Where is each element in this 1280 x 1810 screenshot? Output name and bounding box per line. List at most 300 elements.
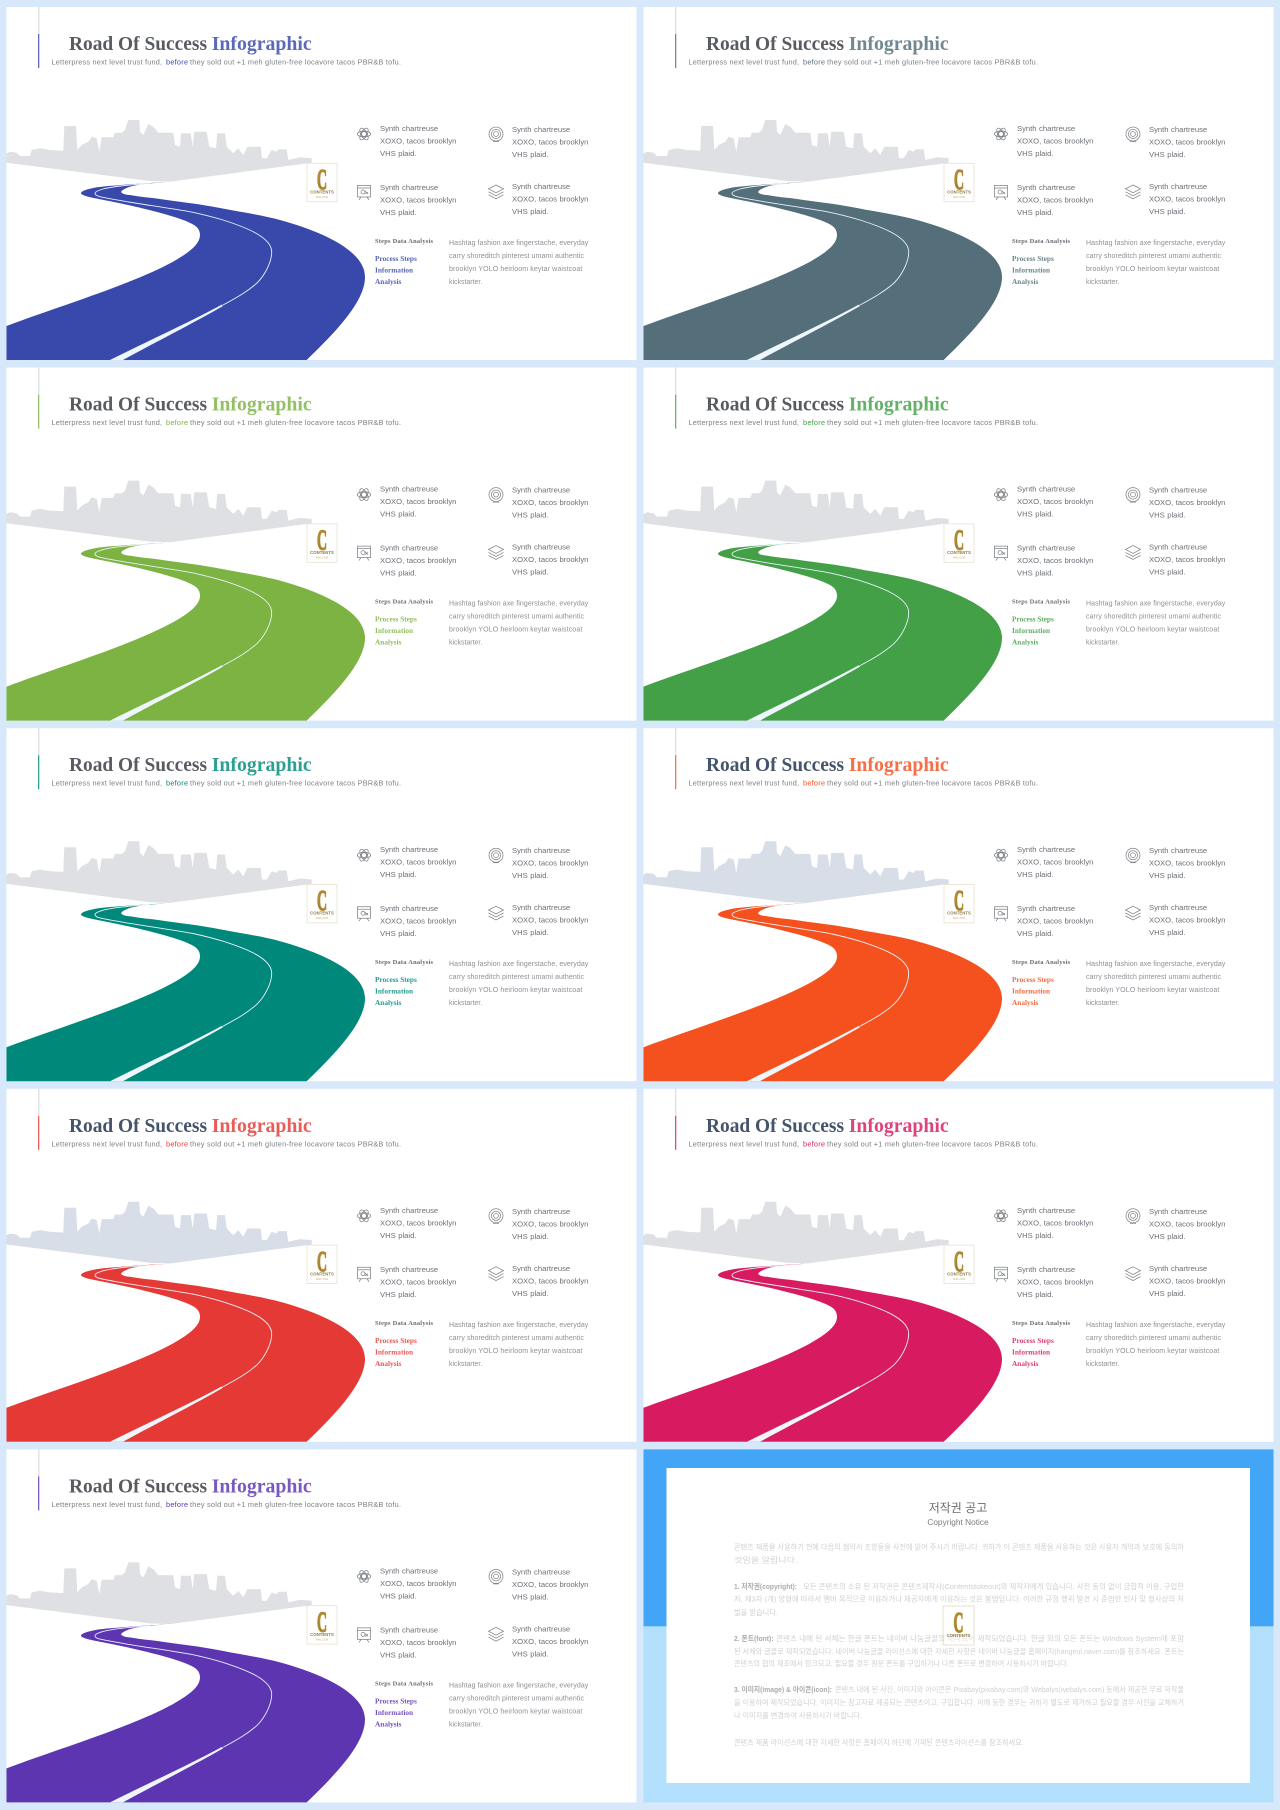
steps list: Information (375, 266, 413, 274)
icon: layers (1126, 546, 1140, 559)
notice section 1 (734, 1581, 1184, 1617)
feature text 2: XOXO, tacos brooklyn (512, 1580, 588, 1589)
icon: presentation (357, 546, 371, 561)
icon: layers (488, 546, 504, 559)
panel: light green slide (6, 368, 636, 721)
notice section 2: 2. 폰트(font): (734, 1634, 774, 1643)
feature text 3 (1017, 904, 1093, 938)
title: Road Of Success (69, 1475, 207, 1497)
icon: layers (488, 906, 504, 920)
feature text 3: Synth chartreuse (380, 904, 438, 913)
logo: C (317, 1246, 327, 1278)
title (706, 1115, 949, 1137)
steps list: Analysis (375, 1359, 402, 1368)
feature text 2: VHS plaid. (512, 150, 548, 159)
feature text 4: VHS plaid. (512, 207, 548, 216)
feature text 4 (512, 1624, 588, 1658)
steps list (375, 1320, 434, 1368)
subtitle: Letterpress next level trust fund, (52, 418, 162, 427)
notice logo: CONTENTS (947, 1633, 970, 1638)
steps list (1012, 1320, 1070, 1368)
feature text 4: XOXO, tacos brooklyn (512, 555, 588, 564)
steps list: Process Steps (375, 1336, 417, 1345)
title: Infographic (849, 33, 949, 55)
title: Infographic (849, 1115, 949, 1137)
road (6, 903, 365, 1081)
notice section 3: 3. 이미지(image) & 아이콘(icon): (734, 1684, 832, 1694)
feature text 1: Synth chartreuse (1017, 485, 1075, 494)
feature text 4: XOXO, tacos brooklyn (512, 916, 588, 925)
panel: red slide (6, 1089, 636, 1442)
subtitle: Letterpress next level trust fund, (52, 779, 162, 788)
title: Road Of Success (706, 754, 844, 776)
logo: CONTENTS (310, 550, 334, 555)
feature text 3: VHS plaid. (380, 929, 416, 938)
icon: layers (1126, 185, 1140, 199)
paragraph: carry shoreditch pinterest umami authentic (1086, 974, 1222, 981)
steps list: Steps Data Analysis (1012, 238, 1070, 245)
subtitle: they sold out +1 meh gluten-free locavore tacos PBR&B tofu. (190, 418, 401, 427)
paragraph (449, 601, 589, 647)
logo: C (954, 885, 964, 917)
subtitle: before (803, 58, 825, 66)
feature text 3: VHS plaid. (1017, 1290, 1054, 1299)
feature text 4 (512, 903, 588, 937)
paragraph (449, 1322, 589, 1368)
feature text 4 (512, 1264, 588, 1298)
title: Infographic (212, 33, 312, 55)
road (644, 182, 1002, 360)
feature text 1: VHS plaid. (380, 870, 416, 879)
feature text 2: Synth chartreuse (512, 1207, 570, 1216)
feature text 2 (1149, 1207, 1225, 1241)
feature text 1: VHS plaid. (380, 1231, 416, 1240)
steps list: Analysis (1012, 638, 1039, 647)
feature text 4: VHS plaid. (1149, 568, 1186, 577)
paragraph: brooklyn YOLO heirloom keytar waistcoat (449, 987, 582, 994)
feature text 4: VHS plaid. (512, 928, 548, 937)
logo: CONTENTS (947, 911, 971, 916)
feature text 3: VHS plaid. (1017, 569, 1054, 578)
subtitle (688, 779, 1038, 788)
feature text 2 (1149, 846, 1225, 880)
steps list: Information (375, 626, 413, 635)
feature text 4: Synth chartreuse (512, 182, 570, 191)
notice section 1: 자, 제3자 (개) 양형에 따라서 멤버 목적으로 이용하거나 제공자에게 이용하는 것은 불법입니다. 이러한 규정 행위 발견 시 준법한 민사 및 형사상의 처 (734, 1594, 1184, 1604)
logo: C (317, 1606, 327, 1638)
panel: purple slide (6, 1449, 636, 1802)
steps list: Information (1012, 987, 1050, 996)
feature text 3: Synth chartreuse (380, 1265, 438, 1274)
subtitle: they sold out +1 meh gluten-free locavore tacos PBR&B tofu. (190, 1139, 401, 1148)
subtitle: Letterpress next level trust fund, (688, 418, 799, 427)
paragraph: carry shoreditch pinterest umami authentic (449, 614, 584, 621)
feature text 2: XOXO, tacos brooklyn (512, 498, 588, 507)
feature text 2 (512, 1207, 588, 1241)
subtitle (52, 58, 401, 66)
feature text 1 (380, 1206, 456, 1240)
paragraph (1086, 961, 1226, 1007)
paragraph: brooklyn YOLO heirloom keytar waistcoat (1086, 266, 1219, 273)
feature text 3: Synth chartreuse (1017, 1265, 1075, 1274)
title (706, 33, 949, 55)
title (69, 754, 312, 776)
logo: CONTENTS (947, 190, 971, 194)
feature text 3: VHS plaid. (1017, 208, 1054, 217)
steps list: Information (1012, 626, 1050, 635)
feature text 4: XOXO, tacos brooklyn (1149, 1276, 1225, 1285)
paragraph: kickstarter. (1086, 279, 1119, 286)
skyline (6, 120, 312, 182)
feature text 2 (512, 1567, 588, 1601)
paragraph: kickstarter. (1086, 1361, 1119, 1368)
subtitle: they sold out +1 meh gluten-free locavore tacos PBR&B tofu. (190, 1500, 401, 1509)
feature text 4: XOXO, tacos brooklyn (1149, 555, 1225, 564)
logo: MAIL.COM (953, 917, 965, 920)
accent rule (38, 1449, 39, 1510)
feature text 1: VHS plaid. (380, 149, 416, 158)
accent rule (675, 368, 676, 429)
feature text 2: VHS plaid. (512, 1232, 548, 1241)
steps list: Information (375, 1708, 413, 1717)
paragraph: Hashtag fashion axe fingerstache, everyday (449, 961, 589, 968)
feature text 1 (1017, 1206, 1093, 1240)
feature text 1: Synth chartreuse (380, 124, 438, 133)
road (644, 543, 1002, 721)
logo: CONTENTS (310, 190, 334, 194)
steps list: Steps Data Analysis (1012, 599, 1070, 606)
logo: MAIL.COM (316, 196, 328, 199)
title: Infographic (212, 394, 312, 416)
feature text 1: XOXO, tacos brooklyn (1017, 136, 1093, 146)
logo: C (954, 525, 964, 557)
feature text 1: VHS plaid. (1017, 510, 1054, 519)
title: Road Of Success (706, 394, 844, 416)
subtitle: they sold out +1 meh gluten-free locavore tacos PBR&B tofu. (827, 418, 1038, 427)
road (6, 1264, 365, 1442)
feature text 1: Synth chartreuse (380, 845, 438, 854)
paragraph (1086, 1322, 1226, 1368)
feature text 1: XOXO, tacos brooklyn (1017, 858, 1093, 867)
subtitle (688, 418, 1038, 427)
feature text 2: VHS plaid. (1149, 150, 1186, 159)
feature text 3: XOXO, tacos brooklyn (380, 556, 456, 565)
paragraph: Hashtag fashion axe fingerstache, everyday (449, 601, 589, 608)
paragraph: kickstarter. (449, 279, 482, 286)
logo: C (317, 525, 327, 557)
title: Road Of Success (69, 1115, 207, 1137)
feature text 3: Synth chartreuse (380, 1625, 438, 1634)
icon: target (489, 848, 503, 863)
feature text 4: VHS plaid. (1149, 1289, 1186, 1298)
road (644, 1264, 1002, 1442)
feature text 2 (1149, 486, 1225, 520)
icon: presentation (357, 907, 371, 921)
paragraph: Hashtag fashion axe fingerstache, everyday (449, 240, 589, 247)
steps list: Process Steps (1012, 254, 1054, 263)
feature text 1: Synth chartreuse (380, 1566, 438, 1575)
feature text 1 (1017, 485, 1093, 519)
subtitle: Letterpress next level trust fund, (52, 1139, 162, 1148)
paragraph: brooklyn YOLO heirloom keytar waistcoat (1086, 627, 1219, 634)
accent rule (38, 1089, 39, 1150)
paragraph: brooklyn YOLO heirloom keytar waistcoat (1086, 987, 1219, 994)
feature text 4: VHS plaid. (512, 1289, 548, 1298)
notice heading (927, 1501, 989, 1527)
steps list: Steps Data Analysis (1012, 959, 1070, 966)
icon: atom (357, 487, 371, 502)
feature text 2: VHS plaid. (1149, 871, 1186, 880)
feature text 2: VHS plaid. (1149, 1232, 1186, 1241)
skyline (6, 841, 312, 903)
notice logo: C (954, 1607, 964, 1639)
icon: target (1126, 127, 1140, 142)
feature text 3: XOXO, tacos brooklyn (1017, 1277, 1093, 1286)
feature text 2 (1149, 125, 1225, 159)
paragraph: carry shoreditch pinterest umami authentic (449, 253, 584, 260)
paragraph: kickstarter. (449, 1361, 482, 1368)
paragraph: brooklyn YOLO heirloom keytar waistcoat (449, 1708, 582, 1715)
paragraph: Hashtag fashion axe fingerstache, everyday (449, 1682, 589, 1689)
paragraph: carry shoreditch pinterest umami authentic (1086, 614, 1222, 621)
steps list (1012, 599, 1070, 647)
feature text 1 (380, 124, 456, 158)
feature text 3: XOXO, tacos brooklyn (1017, 196, 1093, 204)
logo (307, 524, 337, 562)
feature text 3: Synth chartreuse (1017, 904, 1075, 913)
logo: MAIL.COM (316, 1278, 328, 1281)
icon: presentation (357, 1267, 371, 1282)
feature text 3: XOXO, tacos brooklyn (380, 1638, 456, 1647)
paragraph: Hashtag fashion axe fingerstache, everyday (1086, 961, 1226, 968)
feature text 2: VHS plaid. (1149, 511, 1186, 520)
steps list (375, 1680, 434, 1728)
feature text 2: XOXO, tacos brooklyn (1149, 859, 1225, 868)
title: Road Of Success (69, 33, 207, 55)
feature text 1: Synth chartreuse (1017, 845, 1075, 854)
feature text 1: XOXO, tacos brooklyn (380, 497, 456, 506)
panel: orange slide (644, 728, 1274, 1081)
road (6, 182, 365, 360)
logo: CONTENTS (947, 550, 971, 555)
icon: atom (357, 1569, 371, 1584)
paragraph: brooklyn YOLO heirloom keytar waistcoat (449, 1348, 582, 1355)
subtitle: before (166, 58, 188, 66)
steps list: Steps Data Analysis (375, 1320, 434, 1327)
panel: copyright notice (644, 1449, 1274, 1802)
subtitle (52, 779, 401, 788)
steps list: Process Steps (1012, 615, 1054, 624)
subtitle: before (803, 1139, 825, 1148)
skyline (644, 1202, 949, 1264)
feature text 3: Synth chartreuse (1017, 544, 1075, 553)
logo: MAIL.COM (953, 1278, 965, 1281)
feature text 2: VHS plaid. (512, 1592, 548, 1601)
skyline (644, 841, 949, 903)
notice section 2 (734, 1633, 1184, 1668)
logo: MAIL.COM (316, 557, 328, 560)
feature text 4 (1149, 1264, 1225, 1298)
icon: target (489, 127, 503, 142)
feature text 4: VHS plaid. (1149, 928, 1186, 937)
steps list: Information (375, 987, 413, 996)
icon: atom (994, 127, 1008, 141)
title: Road Of Success (706, 1115, 844, 1137)
logo: MAIL.COM (953, 196, 965, 199)
feature text 3 (380, 183, 456, 217)
paragraph: kickstarter. (449, 1721, 482, 1728)
notice intro: 것임을 알립니다. (734, 1554, 798, 1564)
icon: presentation (994, 546, 1008, 561)
road (6, 1624, 365, 1802)
subtitle: before (166, 779, 188, 788)
feature text 1: XOXO, tacos brooklyn (380, 1218, 456, 1227)
logo: C (317, 164, 327, 196)
icon: presentation (994, 1267, 1008, 1282)
title: Infographic (212, 1475, 312, 1497)
feature text 3 (1017, 183, 1093, 217)
feature text 4: VHS plaid. (512, 568, 548, 577)
feature text 1: VHS plaid. (1017, 870, 1054, 879)
feature text 4: XOXO, tacos brooklyn (512, 1276, 588, 1285)
feature text 2: Synth chartreuse (1149, 486, 1207, 495)
logo: MAIL.COM (316, 917, 328, 920)
feature text 3: XOXO, tacos brooklyn (380, 917, 456, 926)
notice section 1: 1. 저작권(copyright): (734, 1581, 797, 1591)
logo: CONTENTS (310, 1271, 334, 1276)
skyline (6, 481, 312, 542)
steps list: Steps Data Analysis (375, 959, 434, 966)
feature text 2 (512, 846, 588, 880)
feature text 4 (512, 543, 588, 577)
paragraph: carry shoreditch pinterest umami authentic (449, 1695, 584, 1702)
feature text 3: XOXO, tacos brooklyn (380, 196, 456, 204)
steps list: Analysis (375, 277, 402, 286)
steps list (375, 238, 434, 286)
icon: target (489, 488, 503, 502)
feature text 3: VHS plaid. (380, 569, 416, 578)
steps list: Analysis (1012, 998, 1039, 1007)
feature text 3: VHS plaid. (380, 1650, 416, 1659)
feature text 1: Synth chartreuse (1017, 1206, 1075, 1215)
feature text 1: XOXO, tacos brooklyn (380, 136, 456, 146)
feature text 3: VHS plaid. (380, 1290, 416, 1299)
icon: atom (994, 848, 1008, 862)
subtitle: before (803, 779, 825, 788)
subtitle (52, 1139, 401, 1148)
steps list: Analysis (375, 998, 402, 1007)
feature text 4: Synth chartreuse (1149, 1264, 1207, 1273)
subtitle: before (803, 418, 825, 427)
logo: C (317, 885, 327, 917)
notice section 3: 을 이용하여 제작되었습니다. 이미지는 참고자료 제공되는 콘텐츠이고, 구입합니다. 이에 등한 경우는 귀하가 별도로 제거하고 필요할 경우 사진을 교체하거 (734, 1697, 1184, 1707)
panel: pink slide (644, 1089, 1274, 1442)
paragraph: Hashtag fashion axe fingerstache, everyday (1086, 240, 1226, 247)
subtitle: Letterpress next level trust fund, (52, 58, 162, 66)
title (69, 33, 312, 55)
steps list (1012, 959, 1070, 1007)
paragraph: carry shoreditch pinterest umami authentic (1086, 253, 1222, 260)
feature text 1 (380, 1566, 456, 1600)
subtitle: Letterpress next level trust fund, (688, 58, 799, 66)
feature text 2: Synth chartreuse (512, 486, 570, 495)
subtitle (688, 58, 1038, 66)
feature text 1 (380, 485, 456, 519)
feature text 1 (1017, 124, 1093, 158)
logo (944, 163, 974, 202)
feature text 2: VHS plaid. (512, 511, 548, 520)
steps list: Steps Data Analysis (375, 1680, 434, 1687)
feature text 4: Synth chartreuse (512, 903, 570, 912)
title: Road Of Success (69, 394, 207, 416)
feature text 2: VHS plaid. (512, 871, 548, 880)
paragraph: brooklyn YOLO heirloom keytar waistcoat (449, 266, 582, 273)
subtitle: they sold out +1 meh gluten-free locavore tacos PBR&B tofu. (827, 58, 1038, 66)
notice section 3 (734, 1684, 1184, 1720)
feature text 3: Synth chartreuse (380, 183, 438, 192)
feature text 2: Synth chartreuse (1149, 125, 1207, 134)
steps list: Process Steps (1012, 1336, 1054, 1345)
paragraph: brooklyn YOLO heirloom keytar waistcoat (1086, 1348, 1219, 1355)
icon: target (489, 1569, 503, 1584)
panel: slate slide (644, 7, 1274, 360)
subtitle: Letterpress next level trust fund, (52, 1500, 162, 1509)
feature text 1: XOXO, tacos brooklyn (1017, 497, 1093, 506)
notice section 2: 콘텐츠의 협의 제조에서 링크되고, 필요할 경우 원문 폰트를 구입하거나 다른 폰트로 변경하여 사용하시기 바랍니다. (734, 1658, 1069, 1668)
paragraph: kickstarter. (1086, 1000, 1119, 1007)
feature text 4 (1149, 543, 1225, 577)
notice section 1: 모든 콘텐츠의 소유 된 저작권은 콘텐츠제작사(Contentstokeout)와 제작자에게 있습니다. 사전 동의 없이 금합적 이용, 구입한 (803, 1581, 1184, 1591)
icon: atom (994, 1209, 1008, 1223)
feature text 2: Synth chartreuse (1149, 1207, 1207, 1216)
feature text 4: XOXO, tacos brooklyn (1149, 194, 1225, 204)
notice heading: 저작권 공고 (929, 1501, 987, 1515)
paragraph: Hashtag fashion axe fingerstache, everyday (449, 1322, 589, 1329)
feature text 1: VHS plaid. (1017, 1231, 1054, 1240)
logo (307, 163, 337, 202)
feature text 3: Synth chartreuse (380, 544, 438, 553)
title (706, 394, 949, 416)
notice intro: 콘텐츠 제품을 사용하기 전에 다음의 협약서 조항들을 사전에 읽어 주시기 바랍니다. 귀하가 이 콘텐츠 제품을 사용하는 것은 사용자 계약과 보호에 동의하 (734, 1542, 1184, 1552)
steps list: Analysis (375, 638, 402, 647)
feature text 4 (1149, 903, 1225, 937)
title: Infographic (849, 394, 949, 416)
accent rule (675, 728, 676, 789)
feature text 3 (1017, 544, 1093, 578)
title (69, 394, 312, 416)
feature text 3 (380, 1265, 456, 1299)
paragraph (449, 961, 589, 1007)
icon: presentation (357, 1628, 371, 1642)
feature text 1: XOXO, tacos brooklyn (380, 858, 456, 867)
steps list: Process Steps (375, 975, 417, 984)
accent rule (675, 7, 676, 68)
title: Infographic (849, 754, 949, 776)
feature text 2 (512, 486, 588, 520)
icon: layers (1126, 906, 1140, 920)
steps list: Information (1012, 266, 1050, 274)
steps list: Analysis (1012, 1359, 1039, 1368)
paragraph: Hashtag fashion axe fingerstache, everyday (1086, 1322, 1226, 1329)
feature text 3: Synth chartreuse (1017, 183, 1075, 192)
subtitle (52, 418, 401, 427)
logo (307, 884, 337, 923)
feature text 2: XOXO, tacos brooklyn (1149, 498, 1225, 507)
feature text 2: Synth chartreuse (1149, 846, 1207, 855)
feature text 2: XOXO, tacos brooklyn (512, 1219, 588, 1228)
notice section 3: 나 이미지를 변경하여 사용하시기 바랍니다. (734, 1710, 862, 1720)
logo: CONTENTS (310, 1632, 334, 1637)
